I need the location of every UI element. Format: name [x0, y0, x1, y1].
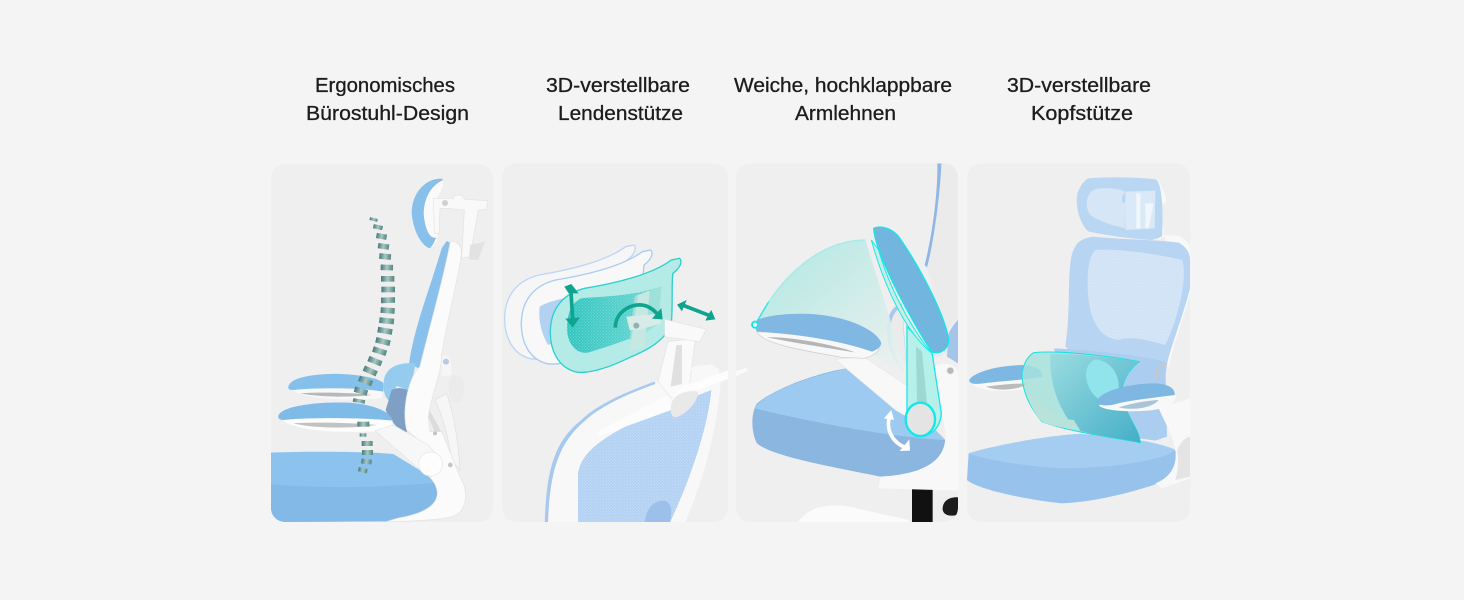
seat cushion	[271, 452, 438, 522]
seat bracket	[879, 364, 958, 491]
raised armrest pad	[874, 227, 949, 353]
heading: Weiche, hochklappbare Armlehnen	[734, 75, 952, 125]
heading: Weiche, hochklappbare Armlehnen: Weiche, hochklappbare	[734, 75, 952, 97]
heading: 3D-verstellbare Kopfstütze	[1007, 75, 1151, 125]
ghost headrests	[505, 245, 652, 364]
heading: 3D-verstellbare Lendenstütze	[546, 75, 690, 125]
arrow: up and down	[564, 284, 580, 328]
motion sector	[755, 240, 907, 373]
lumbar highlight	[1022, 352, 1140, 443]
heading: Ergonomisches Bürostuhl-Design	[306, 75, 469, 125]
arrow: armrest flip	[884, 410, 910, 451]
panel: flip-up armrests	[736, 163, 958, 523]
arrow: forward and back	[677, 300, 715, 321]
seat bracket	[1155, 398, 1190, 488]
white frame spine	[385, 242, 466, 522]
pivot point marker	[752, 322, 758, 328]
headrest	[412, 179, 443, 248]
seat cushion	[752, 368, 948, 477]
screw	[947, 367, 954, 374]
headrest bracket	[433, 195, 488, 260]
panel: ergonomic chair side view with spine	[271, 164, 493, 522]
heading: 3D-verstellbare Lendenstütze: Lendenstütze	[558, 103, 683, 125]
heading: Weiche, hochklappbare Armlehnen: Armlehnen	[795, 103, 896, 125]
heading: 3D-verstellbare Lendenstütze: 3D-verstellbare	[546, 75, 690, 97]
lowered armrest	[755, 314, 909, 417]
left armrest	[969, 365, 1042, 391]
rear knob and loop	[428, 358, 460, 470]
raised armrest stem	[871, 240, 941, 437]
lower armrest	[278, 402, 393, 432]
small white part at left	[736, 368, 748, 377]
spine illustration	[353, 217, 395, 473]
right armrest	[1098, 383, 1176, 411]
backrest	[545, 364, 721, 523]
lumbar support	[384, 363, 416, 433]
headrest	[1077, 177, 1163, 240]
highlighted headrest	[550, 258, 681, 372]
panel: 3D adjustable support close-up	[504, 244, 728, 522]
headrest post and side arm	[625, 340, 728, 427]
backrest mesh	[409, 241, 452, 368]
backrest	[1065, 236, 1190, 374]
heading: Ergonomisches Bürostuhl-Design: Bürostuhl-Design	[306, 103, 469, 125]
base and post	[798, 488, 958, 523]
heading: Ergonomisches Bürostuhl-Design: Ergonomisches	[315, 75, 455, 97]
white rear frame	[1159, 180, 1190, 367]
armrest pivot	[375, 425, 453, 477]
rear backrest and frame	[887, 163, 958, 373]
lumbar cushion	[1054, 348, 1167, 441]
upper armrest	[288, 374, 383, 400]
heading: 3D-verstellbare Kopfstütze: 3D-verstellbare	[1007, 75, 1151, 97]
bracket top	[665, 319, 706, 342]
heading: 3D-verstellbare Kopfstütze: Kopfstütze	[1031, 103, 1133, 125]
panel: chair front view with lumbar highlight	[967, 163, 1190, 522]
seat cushion	[967, 434, 1176, 503]
side bracket	[1156, 364, 1167, 380]
arrow: rotation	[615, 305, 663, 328]
